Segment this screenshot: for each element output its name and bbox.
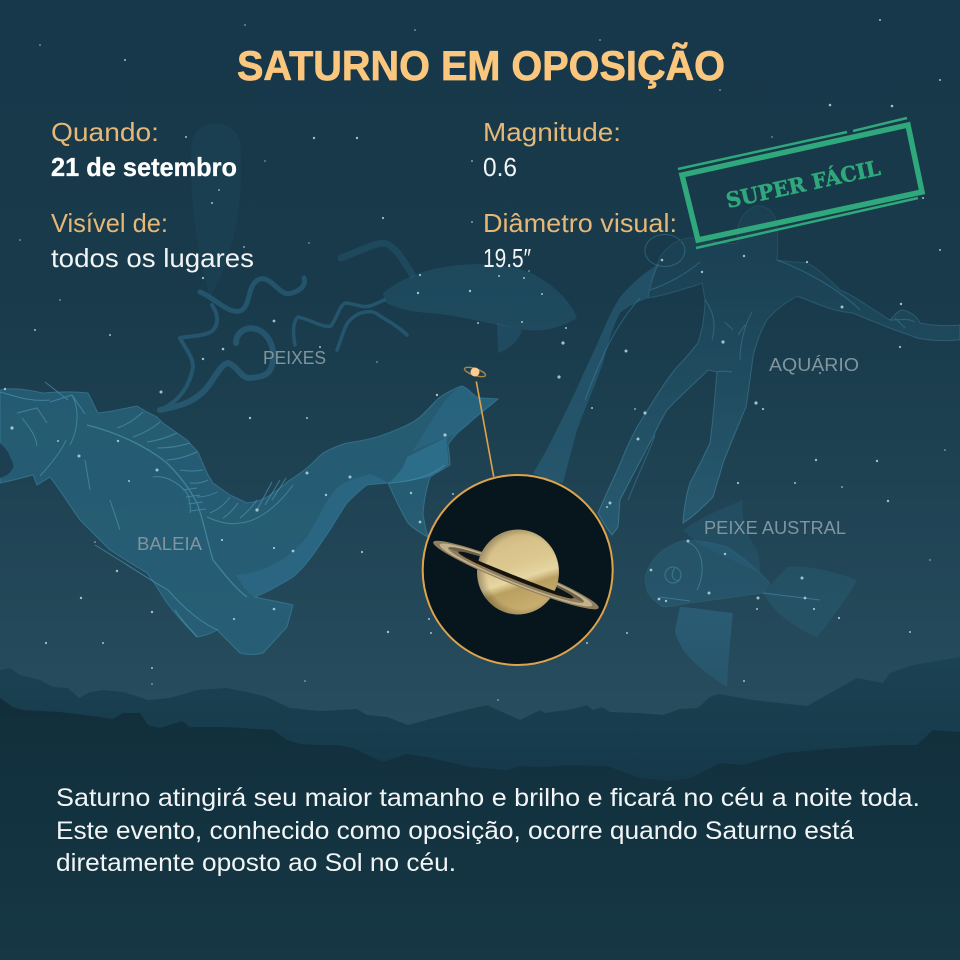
whale tail band <box>236 474 388 597</box>
info block: Quando <box>51 117 237 182</box>
upright fish <box>191 124 241 297</box>
constellation: Peixes <box>160 124 577 410</box>
stamp: super fácil: SUPER FÁCIL <box>724 155 883 213</box>
constellation: Aquário <box>533 206 960 535</box>
constellation label: Peixes: PEIXES <box>263 348 326 368</box>
connector line <box>476 382 494 477</box>
fish fin <box>497 323 522 353</box>
fish body <box>645 540 770 607</box>
info block: Quando: 21 de setembro <box>51 152 237 182</box>
ribbons <box>160 243 412 410</box>
constellation label: Aquário: AQUÁRIO <box>769 355 859 375</box>
mountain ridge: front <box>0 698 960 960</box>
planet <box>477 530 559 614</box>
fish dorsal fin <box>683 500 760 573</box>
whale fins and ribs <box>0 382 445 637</box>
info block: Magnitude: Magnitude: <box>483 117 621 147</box>
whale body <box>0 386 498 654</box>
info block: Visível de <box>51 208 254 273</box>
whale upper tail patch <box>390 437 448 482</box>
stars <box>4 19 946 701</box>
info block: Magnitude: 0.6 <box>483 152 517 182</box>
constellation label: Baleia: BALEIA <box>137 534 202 554</box>
description text <box>56 784 920 877</box>
fish tail <box>763 567 857 637</box>
constellation label: Peixe Austral: PEIXE AUSTRAL <box>704 518 846 538</box>
icon: small Saturn marker <box>463 365 487 379</box>
title: SATURNO EM OPOSIÇÃO <box>237 42 725 89</box>
stamp: super fácil <box>678 118 922 248</box>
water stream <box>533 263 660 483</box>
Saturn magnified circle <box>423 475 613 665</box>
constellation: Peixe Austral <box>645 500 857 687</box>
figure body <box>598 206 960 535</box>
info block: Magnitude <box>483 117 621 182</box>
whale fluke patch <box>412 386 498 452</box>
info block: Quando: Quando: <box>51 117 159 147</box>
horizontal fish <box>383 264 577 330</box>
ring front <box>433 542 598 610</box>
ring back <box>430 533 602 617</box>
info block: Diâmetro visual: Diâmetro visual: <box>483 208 677 238</box>
whale head gap <box>0 443 13 478</box>
info block: Diâmetro visual: 19.5″ <box>483 243 531 273</box>
mountain ridge: back <box>0 657 960 960</box>
description text: diretamente oposto ao Sol no céu. <box>56 849 456 877</box>
figure muscle lines <box>585 234 915 500</box>
info block: Visível de: todos os lugares <box>51 243 254 273</box>
constellation: Baleia <box>0 382 498 654</box>
info block: Diâmetro visual <box>483 208 677 273</box>
fish eye and gill lines <box>660 542 820 601</box>
fish lower fin <box>675 607 733 687</box>
info block: Visível de: Visível de: <box>51 208 168 238</box>
description text: Saturno atingirá seu maior tamanho e brilho e ficará no céu a noite toda. <box>56 784 920 812</box>
description text: Este evento, conhecido como oposição, ocorre quando Saturno está <box>56 817 854 845</box>
